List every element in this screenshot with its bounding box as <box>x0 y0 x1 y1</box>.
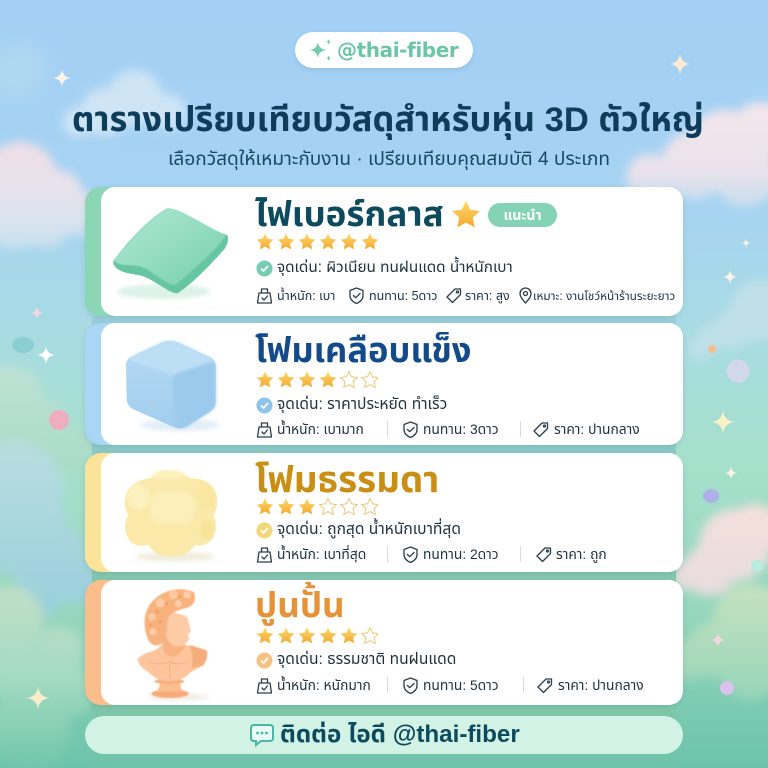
heading: โฟมเคลือบแข็ง <box>255 332 472 370</box>
handle badge <box>295 32 473 68</box>
badge: recommended <box>488 203 557 227</box>
subtitle: เลือกวัสดุให้เหมาะกับงาน · เปรียบเทียบคุณสมบัติ 4 ประเภท <box>168 149 610 170</box>
panel: plaster <box>85 580 683 705</box>
spec row: ราคา: สูง <box>465 289 510 303</box>
icon: sparkles <box>310 39 331 61</box>
spec row: น้ำหนัก: เบามาก <box>277 422 364 437</box>
spec row <box>256 287 675 304</box>
rating stars <box>256 498 378 516</box>
rating stars <box>256 234 378 250</box>
spec row: ราคา: ปานกลาง <box>554 422 640 437</box>
spec row: น้ำหนัก: เบา <box>277 289 335 303</box>
spec row: ทนทาน: 2ดาว <box>423 547 499 562</box>
rating stars <box>256 371 378 388</box>
spec row <box>256 420 640 438</box>
illustration: yellow foam block <box>124 468 218 563</box>
spec row: น้ำหนัก: เบาที่สุด <box>277 547 366 562</box>
icon: chat bubble <box>250 724 274 747</box>
contact text: ติดต่อ ไอดี @thai-fiber <box>280 721 520 748</box>
spec row: น้ำหนัก: หนักมาก <box>277 678 371 693</box>
icon: recommended star <box>452 201 480 228</box>
spec row: ทนทาน: 5ดาว <box>369 289 437 303</box>
spec row <box>256 676 644 694</box>
highlight: จุดเด่น: ราคาประหยัด ทำเร็ว <box>277 396 447 413</box>
badge: recommended: แนะนำ <box>503 207 542 223</box>
footer contact bar <box>85 716 683 754</box>
spec row <box>256 545 607 563</box>
rating stars <box>256 627 378 644</box>
spec row: ทนทาน: 5ดาว <box>423 678 499 693</box>
illustration: green fiberglass sheet <box>113 208 228 300</box>
far top left cloud <box>0 44 48 100</box>
panel: fiberglass <box>85 187 683 316</box>
spec row: เหมาะ: งานโชว์หน้าร้านระยะยาว <box>533 289 675 303</box>
spec row: ทนทาน: 3ดาว <box>423 422 499 437</box>
handle text: @thai-fiber <box>337 38 458 62</box>
highlight: จุดเด่น: ถูกสุด น้ำหนักเบาที่สุด <box>277 521 461 538</box>
spec row: ราคา: ถูก <box>556 547 607 562</box>
heading: โฟมธรรมดา <box>255 459 439 500</box>
panel: regular foam <box>85 453 683 572</box>
illustration: orange plaster bust <box>137 588 208 701</box>
spec row: ราคา: ปานกลาง <box>558 678 644 693</box>
heading: ไฟเบอร์กลาส <box>255 195 444 234</box>
highlight: จุดเด่น: ธรรมชาติ ทนฝนแดด <box>277 651 456 668</box>
highlight: จุดเด่น: ผิวเนียน ทนฝนแดด น้ำหนักเบา <box>277 259 513 276</box>
illustration: blue cube <box>126 340 220 432</box>
panel: hard-coated foam <box>85 323 683 445</box>
title: ตารางเปรียบเทียบวัสดุสำหรับหุ่น 3D ตัวใหญ่ <box>72 101 704 139</box>
heading: ปูนปั้น <box>255 586 345 625</box>
